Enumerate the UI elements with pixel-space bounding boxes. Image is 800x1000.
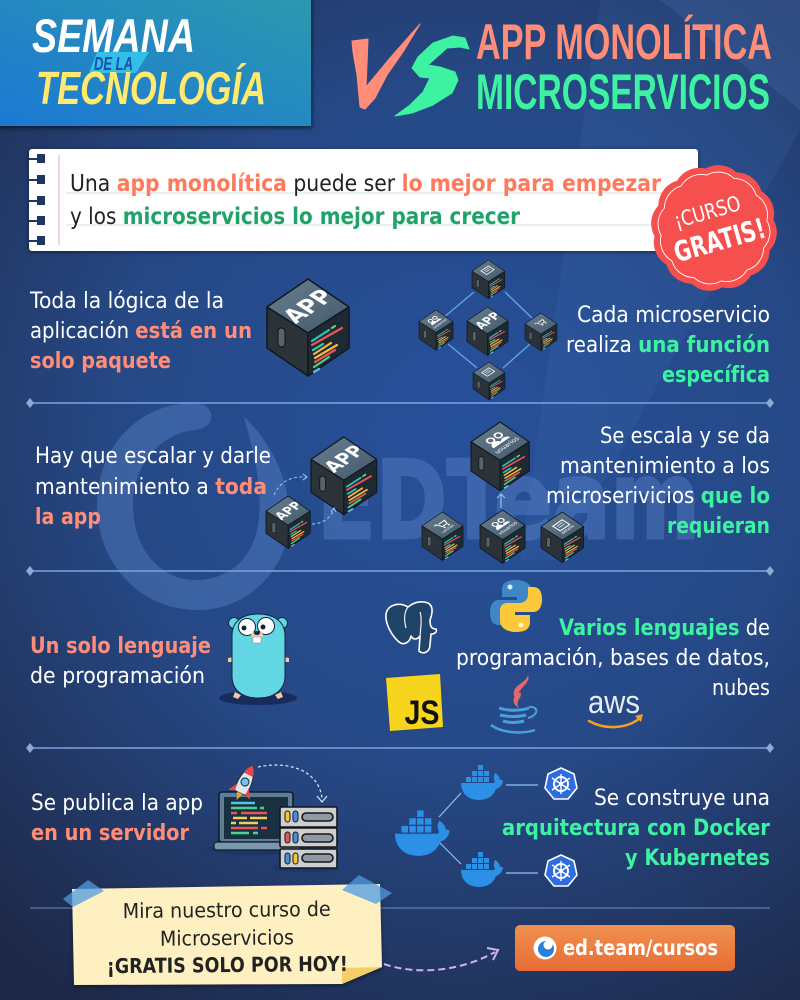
- row 2: left text: mantenimiento a toda: [35, 475, 267, 500]
- button: ed.team/cursos: [515, 925, 735, 971]
- row 2: left text: la app: [35, 505, 101, 530]
- VS lettering: [352, 24, 469, 116]
- icon: Python: [490, 580, 542, 632]
- diagram: scaling one microservice: ventas: [440, 524, 455, 534]
- row 3: right text: nubes: [712, 676, 770, 701]
- row 2: left text: [35, 444, 271, 530]
- notebook text: Una app monolítica puede ser lo mejor para empezar: [70, 169, 661, 197]
- icon: Java: [491, 675, 536, 732]
- row 4: left text: Se publica la app: [31, 791, 203, 816]
- row 3: left text: [30, 634, 211, 689]
- logo: [534, 936, 556, 960]
- large app cube: APP: [319, 442, 370, 476]
- icon: monolithic app cube: APP: [276, 285, 340, 327]
- row 1: left text: solo paquete: [30, 349, 171, 374]
- icon: Go gopher: [219, 614, 297, 705]
- folded corner: [342, 967, 382, 984]
- small app cube: APP: [272, 500, 306, 523]
- S stroke: [395, 36, 469, 116]
- note text: Microservicios: [160, 925, 294, 951]
- row 3: left text: de programación: [30, 664, 205, 689]
- badge: curso gratis: ¡CURSO: [671, 191, 743, 233]
- row 1: right text: realiza una función: [566, 333, 770, 358]
- header banner: [0, 0, 311, 126]
- icon: PostgreSQL: [386, 602, 436, 653]
- note text: Mira nuestro curso de: [123, 897, 331, 923]
- tape right: [342, 875, 392, 904]
- icon: deployment to server: [205, 761, 339, 872]
- icon: JavaScript: JS: [404, 694, 440, 732]
- row 2: right text: [546, 424, 770, 539]
- note text: [106, 897, 348, 978]
- icon: AWS: aws: [588, 684, 640, 720]
- dashed arrow: [258, 765, 327, 802]
- diagram: microservices network: [419, 260, 557, 400]
- big whale: [395, 810, 450, 856]
- kubernetes top: [545, 768, 577, 799]
- rocket: [226, 761, 263, 805]
- row 2: right text: microserivicios que lo: [546, 484, 770, 509]
- diagram: Docker and Kubernetes: [395, 765, 577, 887]
- row 2: right text: requieran: [667, 514, 770, 539]
- row 2: left text: Hay que escalar y darle: [35, 444, 271, 469]
- watermark: EDteam logo: [97, 404, 700, 610]
- badge: curso gratis: GRATIS!: [670, 212, 769, 269]
- row 4: left text: [31, 791, 203, 846]
- V stroke: [352, 24, 420, 109]
- notebook text: [70, 169, 661, 230]
- row 1: left text: aplicación está en un: [30, 319, 252, 344]
- row 1: left text: Toda la lógica de la: [29, 289, 224, 314]
- kubernetes bottom: [545, 855, 577, 886]
- icon: monolithic app cube: [267, 279, 349, 376]
- row 1: right text: específica: [662, 363, 770, 388]
- row 4: right text: arquitectura con Docker: [502, 816, 770, 841]
- notebook panel: [29, 149, 698, 251]
- diagram: scaling one microservice: usuarios: [493, 436, 521, 455]
- diagram: microservices network: APP: [471, 310, 504, 331]
- TECNOLOGÍA: TECNOLOGÍA: [36, 62, 266, 114]
- tape left: [63, 880, 104, 907]
- row 4: right text: Se construye una: [594, 786, 770, 811]
- diagram: scaling one microservice: usuarios: [497, 521, 520, 536]
- DE LA tag: DE LA: [94, 54, 133, 74]
- laptop: [214, 792, 301, 850]
- diagram: scaling one microservice: [422, 422, 584, 563]
- SEMANA: SEMANA: [32, 9, 195, 62]
- main title: [476, 14, 772, 120]
- watermark: EDteam logo: EDTeam: [317, 439, 700, 564]
- icon: JavaScript: [386, 674, 443, 732]
- diagram: scaling the whole app: [266, 437, 377, 548]
- row 4: left text: en un servidor: [31, 821, 189, 846]
- badge: curso gratis: [644, 158, 784, 298]
- row 2: right text: Se escala y se da: [600, 424, 770, 449]
- small whale top: [461, 765, 503, 800]
- arrow to button: [384, 948, 498, 970]
- note text: ¡GRATIS SOLO POR HOY!: [107, 952, 348, 978]
- server stack: [280, 807, 337, 868]
- row 4: right text: y Kubernetes: [625, 846, 770, 871]
- row 3: left text: Un solo lenguaje: [30, 634, 211, 659]
- row 1: right text: Cada microservicio: [577, 303, 770, 328]
- row 1: left text: [29, 289, 252, 374]
- button: ed.team/cursos: ed.team/cursos: [563, 936, 718, 961]
- row 3: right text: programación, bases de datos,: [456, 646, 770, 671]
- diagram: scaling one microservice: detalle: [560, 524, 576, 535]
- notebook text: y los microservicios lo mejor para crecer: [70, 202, 520, 230]
- sticky note callout: [63, 875, 392, 985]
- row 3: right text: [456, 616, 770, 701]
- scale arrows: [274, 474, 336, 524]
- row 4: right text: [502, 786, 770, 871]
- diagram: microservices network: usuarios: [432, 318, 448, 329]
- row 1: right text: [566, 303, 770, 388]
- row 2: right text: mantenimiento a los: [560, 454, 770, 479]
- small whale bottom: [461, 852, 503, 887]
- row 3: right text: Varios lenguajes de: [559, 616, 770, 641]
